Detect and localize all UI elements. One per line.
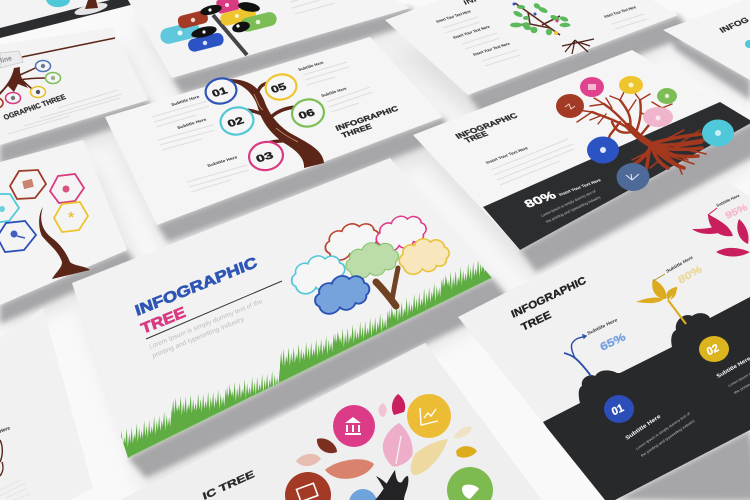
ring 05 xyxy=(264,72,298,102)
tree with branches and roots xyxy=(577,92,706,174)
text block 01: the printing and typesetting industry xyxy=(640,419,696,458)
heading xyxy=(334,104,400,140)
body text lines xyxy=(290,0,335,14)
leaf: crimson xyxy=(392,394,405,415)
text block 02 xyxy=(716,353,750,395)
heading: INFOGRAPHIC xyxy=(510,275,588,321)
subtitle: yellow seedling: Subtitle Here xyxy=(665,254,694,274)
subtitle: blue seedling: Subtitle Here xyxy=(586,317,619,336)
leaf: salmon xyxy=(325,459,374,479)
slide: hexagon tree xyxy=(0,140,127,305)
heading xyxy=(510,275,588,334)
heading: INFOGRAPHIC xyxy=(454,111,520,141)
body text lines xyxy=(0,480,30,500)
leaf: dark brown xyxy=(317,438,337,453)
stat body text: the printing and typesetting industry xyxy=(545,195,602,224)
circle: yellow xyxy=(619,76,643,94)
labels xyxy=(435,5,637,57)
hexagon: yellow: * xyxy=(68,209,74,226)
tree base ellipse xyxy=(73,1,109,17)
hexagon: brown xyxy=(10,170,46,199)
icon: cyan dot xyxy=(745,40,750,48)
slide: 01-06 tree (infographic three) xyxy=(105,37,443,225)
grass xyxy=(121,261,492,458)
labels: Insert Your Text Here xyxy=(472,41,511,57)
heading: INFOGRAPHIC xyxy=(133,254,260,320)
stat: 80%: 80% xyxy=(521,189,559,210)
slide: top-left dark band xyxy=(0,0,150,38)
leaf: mustard xyxy=(456,446,477,458)
tree trunk and branches xyxy=(228,79,324,168)
stat body text: Lorem Ipsum is simply dummy text of xyxy=(540,189,597,218)
body text lines xyxy=(443,14,647,66)
text block 01 xyxy=(625,412,696,458)
ring 06: 06 xyxy=(297,107,318,122)
slide bottom edge xyxy=(128,278,492,458)
ring 02: 02 xyxy=(226,115,247,130)
stat: 65%: 65% xyxy=(599,331,628,354)
hexagon: pink xyxy=(50,174,84,203)
circle: green with icon xyxy=(447,467,493,500)
tree pole xyxy=(213,15,247,55)
underline xyxy=(146,281,282,339)
text block 01: Subtitle Here xyxy=(625,414,662,442)
leaf: pale cream xyxy=(453,426,472,438)
ring 02 xyxy=(218,105,256,137)
circle: brown xyxy=(556,94,584,118)
slide: main infographic tree xyxy=(72,158,492,458)
body text lines xyxy=(8,90,122,134)
circle: yellow with chart icon xyxy=(407,394,451,438)
hexagon: cyan xyxy=(0,194,19,223)
body text: Lorem Ipsum is simply dummy text of the xyxy=(148,298,264,351)
subtitle labels: Subtitle Here xyxy=(297,60,325,72)
slide: top-left infographic three xyxy=(0,27,148,145)
badge 01 xyxy=(604,395,634,423)
cloud: blue xyxy=(312,270,372,317)
leaf: cream xyxy=(411,439,448,475)
slide: top center coloured signpost tree xyxy=(128,0,410,78)
tree trunk and rings xyxy=(0,60,60,108)
leaf: pale xyxy=(296,454,321,466)
subtitle labels: Subtitle Here xyxy=(320,86,348,98)
branch pills xyxy=(159,0,278,53)
subtitle labels: Subtitle Here xyxy=(206,154,239,168)
slide: top right xyxy=(663,0,750,80)
cloud: green xyxy=(343,238,401,281)
text block 01: Lorem Ipsum is simply dummy text of xyxy=(635,412,691,451)
circle: blue xyxy=(349,489,377,500)
cloud: pink xyxy=(373,211,429,254)
subtitle labels xyxy=(170,60,348,168)
tree trunk xyxy=(39,207,90,279)
cloud: red xyxy=(322,218,382,263)
heading xyxy=(454,111,520,145)
heading: TREE xyxy=(139,304,188,338)
slide: top center-right green tree xyxy=(385,0,678,95)
ring 06 xyxy=(290,97,326,129)
heading xyxy=(133,254,260,338)
body text lines xyxy=(491,139,574,185)
circle: cyan xyxy=(702,120,734,146)
sub heading: Insert Your Text Here xyxy=(485,146,530,165)
heading: OGRAPHIC THREE xyxy=(2,92,67,122)
ring 05: 05 xyxy=(269,81,289,96)
tree roots xyxy=(562,39,594,54)
heading: INFOG xyxy=(718,16,750,35)
body text: printing and typesetting industry. xyxy=(151,315,246,360)
dark band xyxy=(483,102,750,250)
slide: left bottom xyxy=(0,308,93,500)
slide: bottom center leaf tree xyxy=(120,343,542,500)
labels: Insert Your Text Here xyxy=(435,9,472,24)
heading: TREE xyxy=(520,310,553,334)
heading: TREE xyxy=(463,129,491,145)
leaf: pale pink xyxy=(378,403,387,417)
subtitle: pink plant: Subtitle Here xyxy=(715,192,741,208)
tree trunk xyxy=(376,268,398,306)
body text lines xyxy=(152,62,372,192)
dark plant xyxy=(375,470,408,500)
leaf: big pink xyxy=(383,423,413,467)
subtitle labels: Subtitle Here xyxy=(176,116,208,130)
circle: blue xyxy=(587,136,619,164)
hexagon: yellow xyxy=(54,202,88,232)
circle: light pink xyxy=(643,107,673,127)
circle: brown with icon xyxy=(285,472,331,500)
icon: cyan cloud xyxy=(46,0,70,7)
badge 01: 01 xyxy=(610,402,626,418)
ring 03 xyxy=(247,139,285,173)
small tree xyxy=(0,440,3,476)
badge 02: 02 xyxy=(705,342,721,358)
stat: 80%: 80% xyxy=(677,263,705,287)
dark ground with bumps xyxy=(543,297,750,500)
circle: pink with bank icon xyxy=(333,405,375,447)
seedling: yellow xyxy=(636,274,686,324)
heading: THREE xyxy=(340,122,373,140)
labels: Insert Your Text Here xyxy=(452,24,491,40)
tab label xyxy=(0,51,23,68)
circle: slate xyxy=(616,163,650,191)
pink plant xyxy=(692,208,750,256)
hexagon: blue xyxy=(0,221,36,252)
seedling: blue xyxy=(564,335,591,376)
ring 01: 01 xyxy=(210,85,230,100)
slide: seedlings on dark ground xyxy=(458,180,750,500)
tree with leaves xyxy=(510,2,570,35)
text block 02: Subtitle Here xyxy=(716,356,750,380)
subtitle labels: Subtitle Here xyxy=(170,94,201,107)
heading: INFOGRAPHIC xyxy=(334,104,400,133)
badge 02 xyxy=(699,336,729,362)
ring 01 xyxy=(204,76,238,106)
circle: pink xyxy=(580,77,604,97)
cloud: cyan xyxy=(288,250,348,297)
slide: dark tree with roots xyxy=(413,50,750,250)
circle: green xyxy=(657,88,677,104)
ring 03: 03 xyxy=(254,150,276,165)
stat: 95%: 95% xyxy=(724,202,750,222)
labels: Insert Your Text Here xyxy=(603,5,637,19)
cloud: yellow xyxy=(396,235,452,276)
stat label: Insert Your Text Here xyxy=(558,178,603,197)
divider line xyxy=(22,38,115,57)
